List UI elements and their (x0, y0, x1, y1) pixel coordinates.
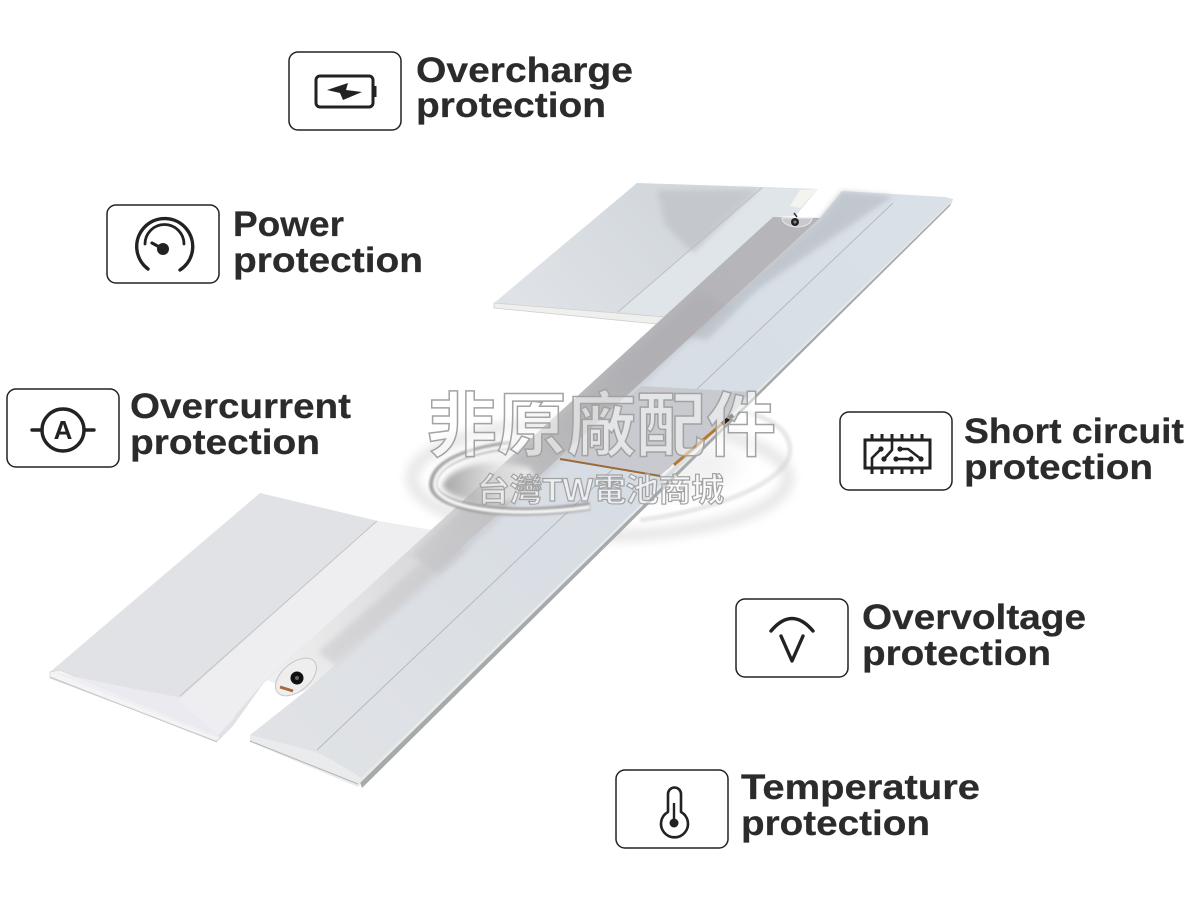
label: overcurrent: protection (130, 422, 320, 462)
icon: ammeter (32, 409, 94, 451)
upper right battery panel (494, 183, 818, 324)
label: overcurrent: Overcurrent (130, 386, 351, 426)
battery illustration (50, 183, 953, 788)
label: short circuit: Short circuit (964, 411, 1184, 451)
icon: ammeter: A (54, 415, 73, 445)
tab connector bottom (269, 651, 323, 703)
opened layer with copper edge (560, 386, 750, 476)
icon: thermometer (661, 788, 688, 837)
callout: short circuit protection (840, 411, 1184, 490)
callout: overvoltage protection (736, 597, 1086, 677)
icon: gauge (137, 219, 193, 270)
label: temperature: protection (741, 803, 930, 843)
icon: battery with bolt (316, 76, 376, 107)
label: overvoltage: Overvoltage (862, 597, 1086, 637)
callout: overcharge protection (289, 50, 633, 130)
swirl haze behind battery (412, 420, 788, 536)
label: overvoltage: protection (862, 633, 1051, 673)
long central battery strip (250, 191, 953, 788)
label: power: protection (233, 240, 423, 280)
callout: power protection (107, 204, 423, 283)
callout: temperature protection (616, 767, 980, 848)
icon: voltage (771, 618, 813, 661)
metallic swirl ring (433, 412, 790, 520)
folded centre tab (267, 217, 820, 693)
watermark: 台灣TW電池商城 (477, 472, 724, 508)
tab connector top (782, 213, 812, 227)
label: overcharge: protection (416, 85, 606, 125)
callout: overcurrent protection (7, 386, 351, 467)
label: temperature: Temperature (741, 767, 980, 807)
label: power: Power (233, 204, 344, 244)
watermark (427, 387, 776, 508)
watermark: 非原廠配件 (427, 387, 776, 465)
lower left battery panel (50, 493, 431, 742)
icon: circuit chip (865, 434, 930, 474)
label: overcharge: Overcharge (416, 50, 633, 90)
label: short circuit: protection (964, 447, 1153, 487)
